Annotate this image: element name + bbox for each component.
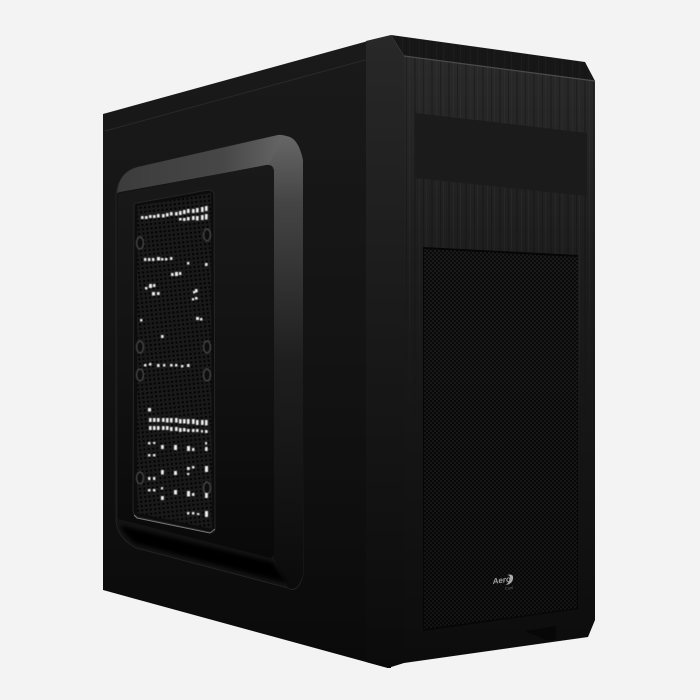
mesh shading [424,249,578,629]
side panel recessed bezel [116,135,303,589]
front badge plate [415,113,587,196]
logo subword: Cool [504,585,513,591]
mesh grille [424,249,578,629]
foot notch [525,626,556,641]
side panel rim line [105,60,365,131]
bezel bottom bevel [120,525,288,584]
brand logo [491,574,513,591]
top bevel stripes [391,35,595,81]
logo swoosh [506,574,513,585]
logo wordmark: Aero [491,575,511,586]
vent plate [133,190,215,533]
top bevel [391,35,595,81]
case body [103,35,595,668]
bezel outer shape [116,135,303,589]
mesh grille frame [423,247,578,631]
front panel [404,56,595,663]
corner strip [366,35,404,668]
illustration: PC tower case [103,35,596,668]
bezel top bevel [117,135,293,193]
light dots through vent [140,206,208,517]
vent bottom highlight [134,515,215,533]
side panel [103,36,391,668]
bezel inner panel [118,165,274,558]
vent plate frame [133,190,215,532]
brushed front texture [406,57,594,100]
mounting screws [136,229,210,494]
front top highlight [404,56,595,81]
vent perforations [137,193,212,529]
bezel right bevel [268,136,303,589]
